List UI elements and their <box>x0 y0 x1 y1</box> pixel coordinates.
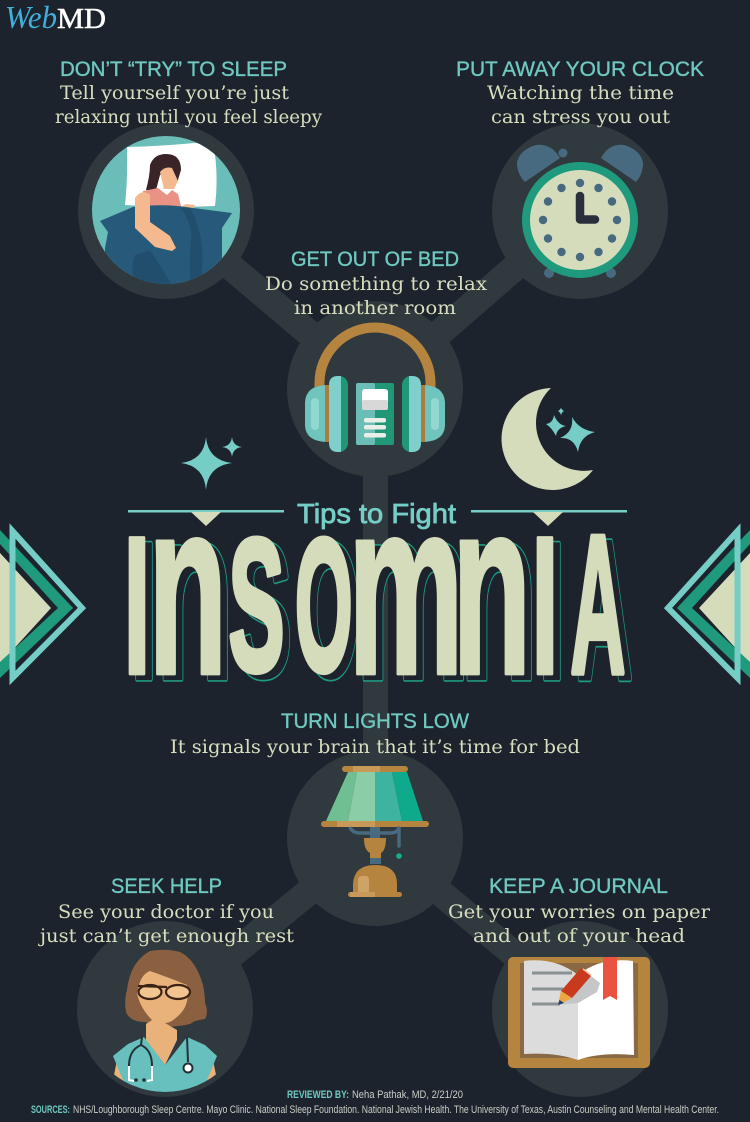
tip text: put away your clock: PUT AWAY YOUR CLOCK <box>456 57 705 81</box>
tip text: seek help: SEEK HELP <box>111 874 222 898</box>
tip text: get out of bed: GET OUT OF BED <box>291 247 459 271</box>
title letter I: I <box>130 502 158 722</box>
clock hands <box>580 196 595 220</box>
title letter M: m <box>355 454 471 733</box>
lamp fittings <box>350 827 399 833</box>
tip text: keep a journal: Get your worries on paper <box>448 901 711 923</box>
lamp base <box>364 838 386 858</box>
title letter N: n <box>148 449 227 727</box>
WebMD logo: MD <box>57 3 106 35</box>
scrubs <box>113 1037 217 1092</box>
tip text: seek help: just can’t get enough rest <box>38 925 294 947</box>
tip text: keep a journal: and out of your head <box>473 925 685 947</box>
icon: alarm clock <box>517 145 643 278</box>
icon: woman sleeping in bed <box>92 136 240 300</box>
tip text: don't try to sleep: DON’T “TRY” TO SLEEP <box>60 57 287 81</box>
tip text: turn lights low: It signals your brain that it’s time for bed <box>170 736 580 758</box>
hair <box>125 950 207 1027</box>
title letter A: A <box>570 494 625 715</box>
left page <box>524 960 578 1060</box>
right ear cup <box>424 385 445 442</box>
right chevron triangles <box>668 530 750 678</box>
title letter N: n <box>452 449 531 727</box>
subtitle: tips to fight <box>128 498 627 529</box>
title letter A: A <box>578 500 632 720</box>
title letter A: A <box>578 500 632 720</box>
shoulders and top <box>143 188 182 206</box>
icon: headphones and music player <box>305 328 445 452</box>
icon: crescent moon with stars <box>502 388 595 490</box>
right page <box>578 960 634 1060</box>
title letter M: m <box>355 454 471 733</box>
tip text: get out of bed <box>265 247 487 319</box>
title letter M: m <box>348 449 464 727</box>
icon: doctor with stethoscope <box>112 950 218 1092</box>
reviewer credit: REVIEWED BY: <box>287 1089 349 1101</box>
title letter O: O <box>302 507 360 716</box>
title letter I: I <box>538 502 566 722</box>
pillow <box>125 141 217 207</box>
title letter S: S <box>236 505 292 716</box>
pencil shadow <box>558 976 600 1005</box>
title letter N: n <box>459 454 538 733</box>
icon: sparkle stars <box>181 437 242 490</box>
connector network <box>77 123 668 1097</box>
tip text: seek help <box>38 874 294 947</box>
left chevron triangles <box>0 530 82 678</box>
title letter N: n <box>155 454 234 733</box>
written lines <box>532 973 572 1004</box>
title letter N: n <box>459 454 538 733</box>
title letter S: S <box>228 500 285 710</box>
reviewer credit <box>287 1089 463 1101</box>
arm <box>135 192 176 251</box>
tip text: don't try to sleep: Tell yourself you’re just <box>60 82 289 104</box>
tip text: put away your clock <box>456 57 705 128</box>
lamp shade <box>326 772 357 821</box>
tip text: put away your clock: Watching the time <box>487 82 674 104</box>
tip text: seek help: See your doctor if you <box>58 901 274 923</box>
subtitle: tips to fight: Tips to Fight <box>297 498 456 529</box>
icon: table lamp <box>321 766 429 897</box>
blanket <box>100 205 232 284</box>
tip text: get out of bed: in another room <box>294 297 456 319</box>
tip text: don't try to sleep <box>55 57 322 128</box>
title letter I: I <box>531 496 559 716</box>
tip text: get out of bed: Do something to relax <box>265 273 487 295</box>
bookmark <box>603 957 617 1000</box>
WebMD logo: Web <box>5 0 57 35</box>
title letter O: O <box>302 507 360 716</box>
title letter N: n <box>155 454 234 733</box>
face and neck <box>137 971 188 1065</box>
title letter I: I <box>538 502 566 722</box>
reviewer credit: Neha Pathak, MD, 2/21/20 <box>352 1089 463 1101</box>
title letter S: S <box>236 505 292 716</box>
title letter I: I <box>123 496 151 716</box>
tip text: keep a journal: KEEP A JOURNAL <box>489 874 668 898</box>
WebMD logo <box>5 0 106 35</box>
sources line: SOURCES: <box>31 1104 70 1116</box>
book cover <box>508 957 650 1068</box>
headband <box>320 328 430 405</box>
pencil <box>558 968 591 1005</box>
face <box>160 168 178 189</box>
stethoscope <box>128 1037 189 1066</box>
music player <box>356 383 394 445</box>
tip text: turn lights low <box>170 709 580 758</box>
glasses <box>138 985 190 999</box>
arms <box>114 1064 216 1082</box>
tip text: turn lights low: TURN LIGHTS LOW <box>281 709 470 733</box>
title: insomnia <box>123 449 632 733</box>
clock face <box>526 166 634 274</box>
bells <box>517 145 560 182</box>
hair <box>146 154 181 190</box>
tip text: keep a journal <box>448 874 711 947</box>
icon: open journal with pencil <box>508 957 650 1068</box>
title letter I: I <box>130 502 158 722</box>
title letter O: O <box>295 502 353 711</box>
hour dots <box>539 179 621 261</box>
left ear cup <box>305 385 326 442</box>
tip text: put away your clock: can stress you out <box>491 106 670 128</box>
tip text: don't try to sleep: relaxing until you feel sleepy <box>55 106 322 128</box>
